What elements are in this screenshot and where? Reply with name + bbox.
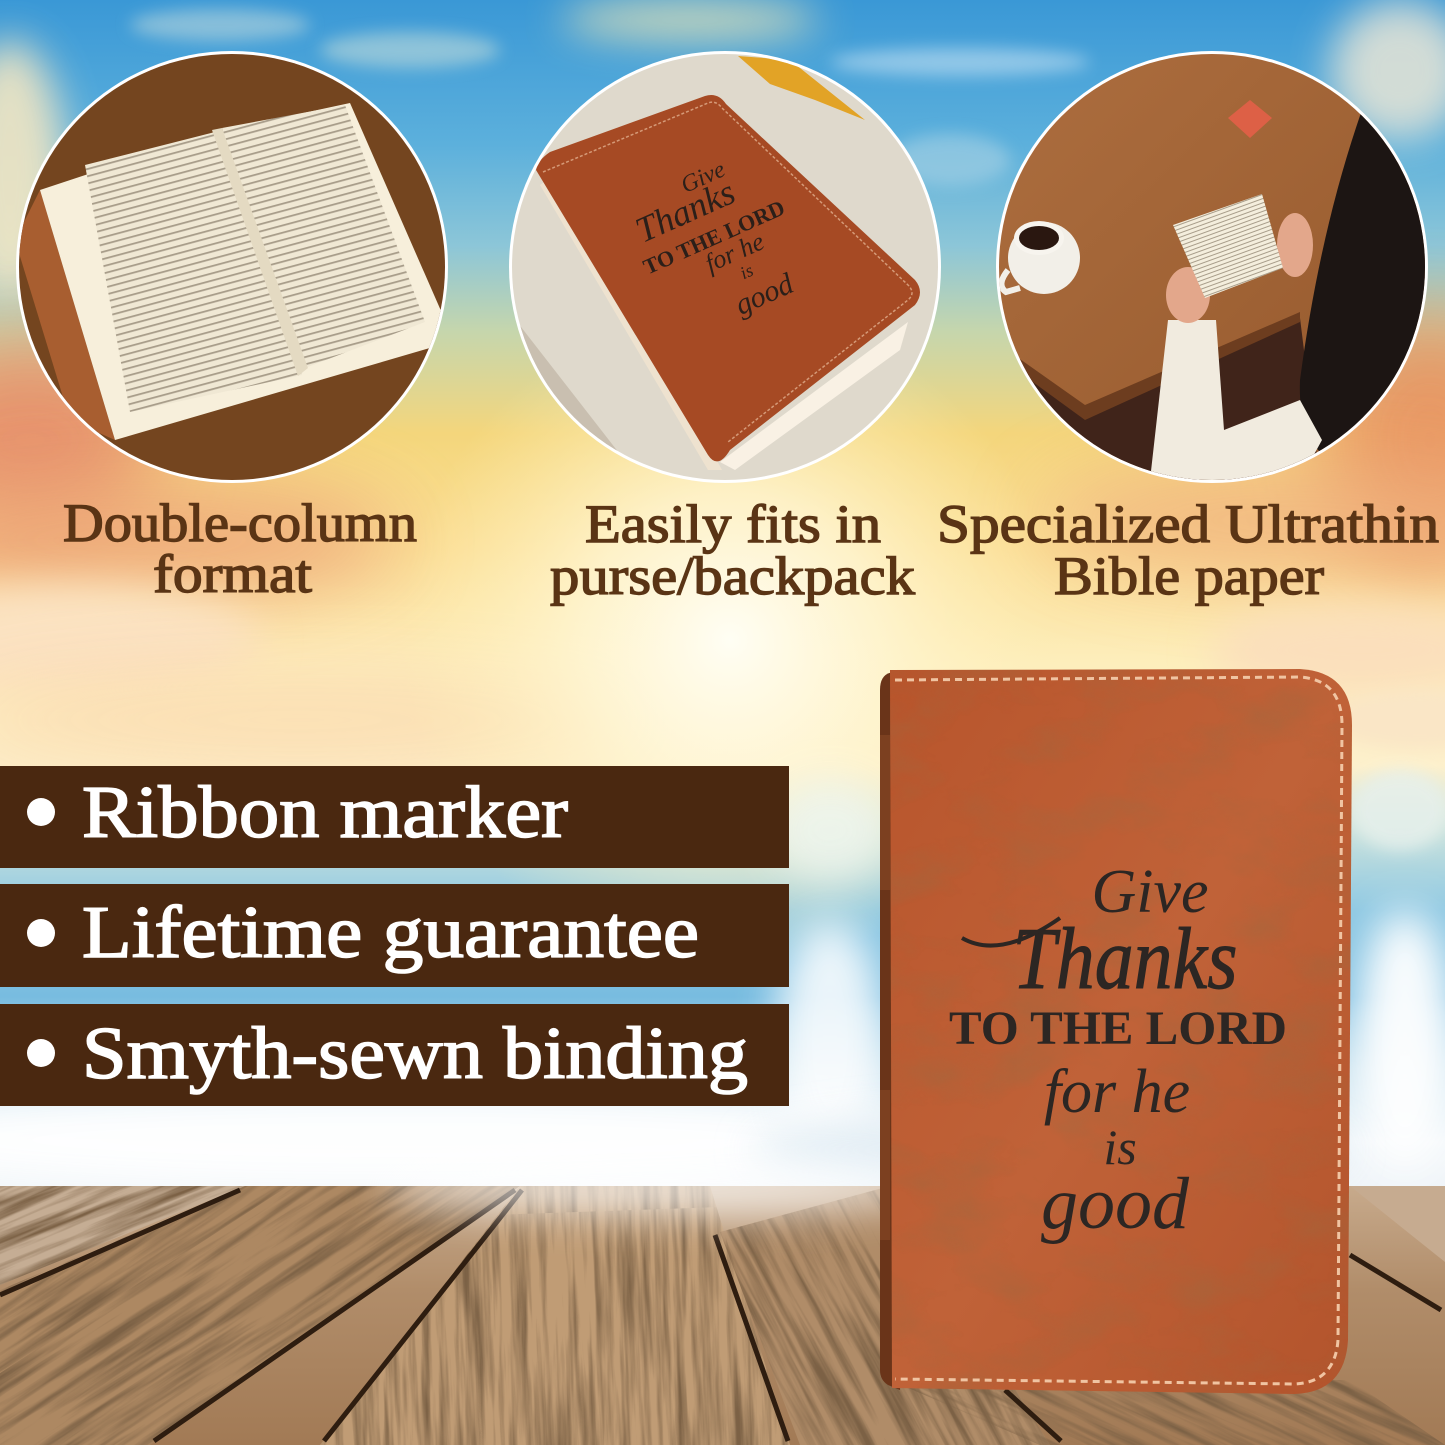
leather bible cover bbox=[880, 660, 1360, 1400]
photo circle: leather bible on planks: TO THE LORD bbox=[639, 195, 788, 279]
cover inscription bbox=[949, 858, 1287, 1245]
cover inscription: Thanks bbox=[1012, 911, 1238, 1008]
cover inscription: good bbox=[1041, 1163, 1190, 1245]
wooden table bbox=[0, 1162, 1445, 1445]
photo circle: leather bible on planks: good bbox=[730, 267, 799, 322]
feature bar: lifetime guarantee: Lifetime guarantee bbox=[82, 892, 699, 974]
photo circle: open bible bbox=[10, 50, 460, 490]
photo circle: leather bible on planks: for he bbox=[701, 227, 768, 278]
feature bar: lifetime guarantee bbox=[0, 884, 789, 987]
feature bar: ribbon marker: Ribbon marker bbox=[82, 772, 568, 854]
caption: ultrathin paper bbox=[937, 494, 1439, 606]
photo circle: leather bible on planks: Give bbox=[677, 156, 729, 199]
cover inscription: is bbox=[1103, 1119, 1137, 1175]
photo circle: leather bible on planks bbox=[500, 50, 950, 490]
feature bar: smyth-sewn binding: Smyth-sewn binding bbox=[82, 1013, 748, 1095]
feature bar: ribbon marker bbox=[0, 766, 789, 868]
caption: ultrathin paper: Bible paper bbox=[1054, 546, 1324, 606]
caption: double-column format: format bbox=[153, 544, 312, 604]
caption: easily fits bbox=[550, 494, 915, 606]
caption: double-column format bbox=[63, 493, 417, 604]
caption: easily fits: purse/backpack bbox=[550, 546, 915, 606]
caption: ultrathin paper: Specialized Ultrathin bbox=[937, 494, 1439, 554]
photo circle: reading at a table bbox=[990, 50, 1435, 490]
photo circle: leather bible on planks: Thanks bbox=[629, 172, 741, 250]
caption: double-column format: Double-column bbox=[63, 493, 417, 553]
cover inscription: TO THE LORD bbox=[949, 1002, 1287, 1055]
photo circle: leather bible on planks: is bbox=[737, 260, 756, 283]
cover inscription: for he bbox=[1044, 1058, 1190, 1126]
feature bar: smyth-sewn binding bbox=[0, 1004, 789, 1106]
cover inscription: Give bbox=[1091, 858, 1209, 926]
caption: easily fits: Easily fits in bbox=[585, 494, 881, 554]
